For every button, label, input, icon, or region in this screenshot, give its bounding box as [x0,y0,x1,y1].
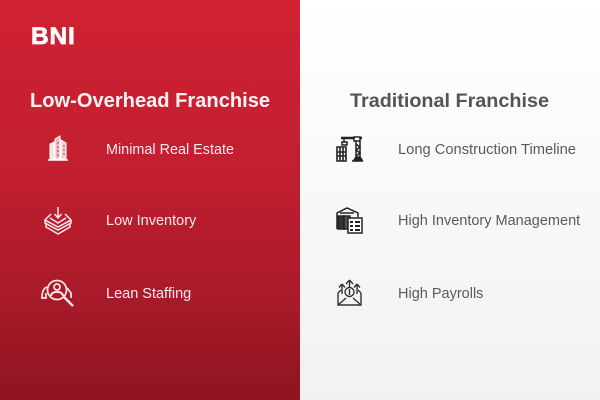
label: Long Construction Timeline: Long Construction Timeline [398,142,576,158]
icon: building [48,135,68,161]
label: Low Inventory: Low Inventory [106,213,196,229]
label: High Payrolls: High Payrolls [398,286,483,302]
label: Lean Staffing: Lean Staffing [106,286,191,302]
icon: construction crane [336,136,364,162]
panel: traditional franchise [300,0,600,400]
icon: envelope with arrows [337,280,362,306]
panel: low-overhead franchise [0,0,300,400]
icon: warehouse and checklist [336,207,363,234]
heading: Traditional Franchise: Traditional Franchise [350,90,549,112]
icon: magnifier with person [41,280,74,307]
label: Minimal Real Estate: Minimal Real Estate [106,142,234,158]
heading: Low-Overhead Franchise: Low-Overhead Franchise [30,90,270,112]
logo: BNI: BNI [31,23,76,50]
icon: box with arrow [44,207,72,235]
label: High Inventory Management: High Inventory Management [398,213,580,229]
